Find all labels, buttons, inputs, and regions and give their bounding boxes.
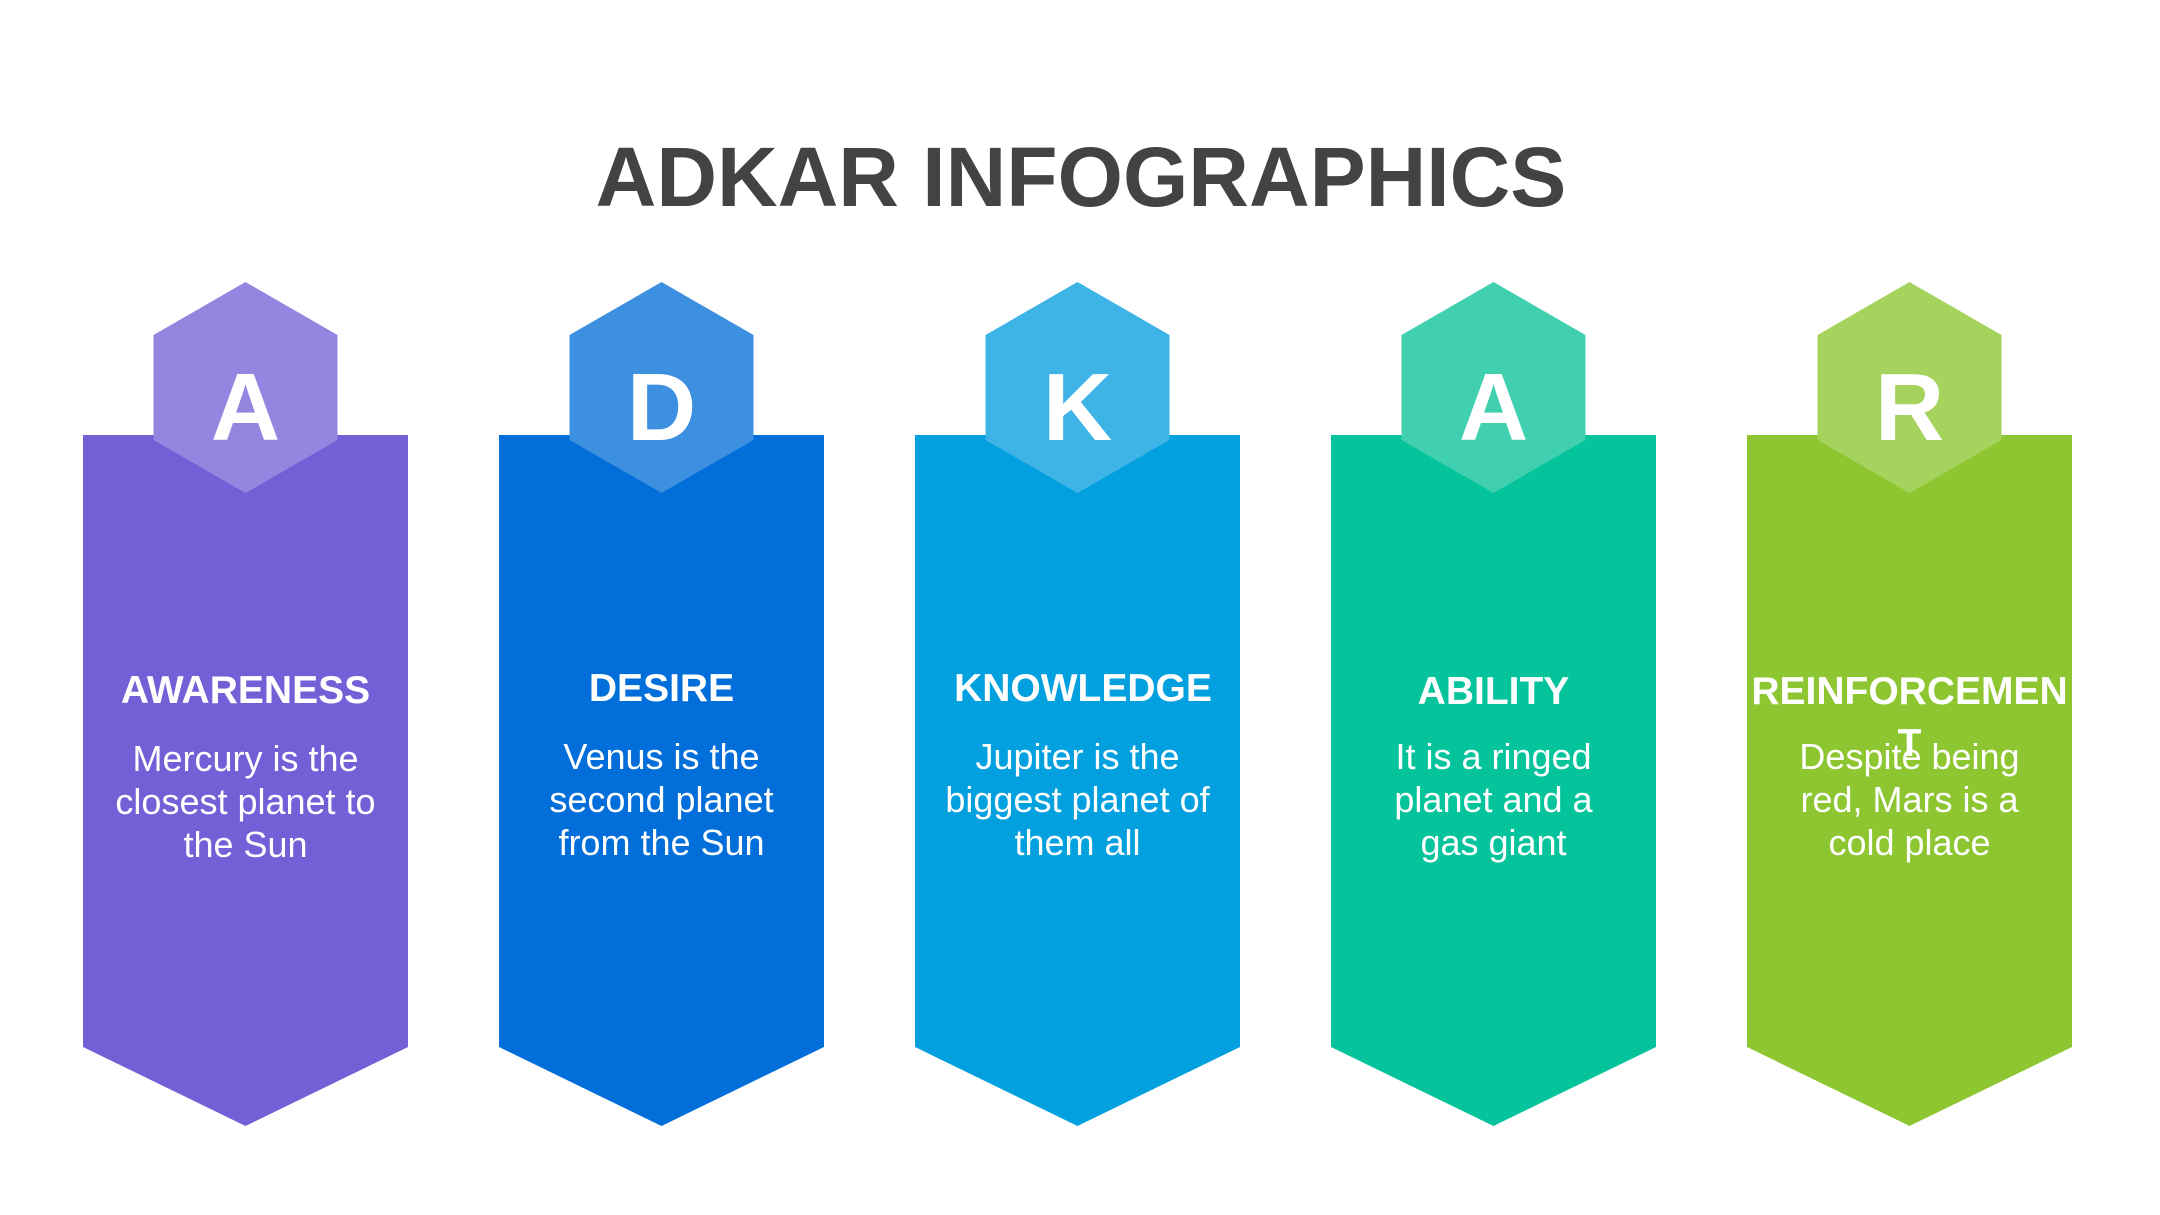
banner shape bbox=[1747, 435, 2072, 1126]
icon: hexagon D bbox=[570, 282, 754, 493]
body text: planet and a bbox=[1394, 779, 1594, 820]
heading: DESIRE bbox=[589, 667, 734, 710]
icon: hexagon A: A bbox=[211, 354, 280, 461]
icon: hexagon K: K bbox=[1043, 354, 1112, 461]
heading: ABILITY bbox=[1418, 670, 1569, 713]
icon: hexagon A: A bbox=[1459, 354, 1528, 461]
body text: cold place bbox=[1828, 822, 1991, 863]
icon: hexagon R bbox=[1818, 282, 2002, 493]
body text: Mercury is the bbox=[132, 738, 359, 779]
body text: biggest planet of bbox=[945, 779, 1211, 820]
body text: closest planet to bbox=[115, 781, 376, 822]
body text: second planet bbox=[549, 779, 774, 820]
panel: knowledge bbox=[915, 282, 1240, 1126]
body text: red, Mars is a bbox=[1800, 779, 2020, 820]
title: ADKAR INFOGRAPHICS bbox=[596, 130, 1566, 224]
banner shape bbox=[83, 435, 408, 1126]
panel: awareness bbox=[83, 282, 408, 1126]
heading: KNOWLEDGE bbox=[954, 667, 1212, 710]
heading: REINFORCEMEN bbox=[1751, 670, 2068, 713]
banner shape bbox=[1331, 435, 1656, 1126]
panel: reinforcement bbox=[1747, 282, 2072, 1126]
icon: hexagon A bbox=[1402, 282, 1586, 493]
body text: them all bbox=[1014, 822, 1141, 863]
icon: hexagon A bbox=[154, 282, 338, 493]
panel: desire bbox=[499, 282, 824, 1126]
body text: Venus is the bbox=[563, 736, 760, 777]
icon: hexagon R: R bbox=[1875, 354, 1944, 461]
heading: AWARENESS bbox=[121, 669, 370, 712]
heading: T bbox=[1898, 722, 1922, 765]
icon: hexagon D: D bbox=[627, 354, 696, 461]
body text: gas giant bbox=[1420, 822, 1567, 863]
body text: the Sun bbox=[183, 824, 308, 865]
banner shape bbox=[915, 435, 1240, 1126]
panel: ability bbox=[1331, 282, 1656, 1126]
banner shape bbox=[499, 435, 824, 1126]
icon: hexagon K bbox=[986, 282, 1170, 493]
body text: Jupiter is the bbox=[975, 736, 1180, 777]
body text: from the Sun bbox=[558, 822, 765, 863]
body text: It is a ringed bbox=[1395, 736, 1592, 777]
body text: Despite being bbox=[1799, 736, 2020, 777]
